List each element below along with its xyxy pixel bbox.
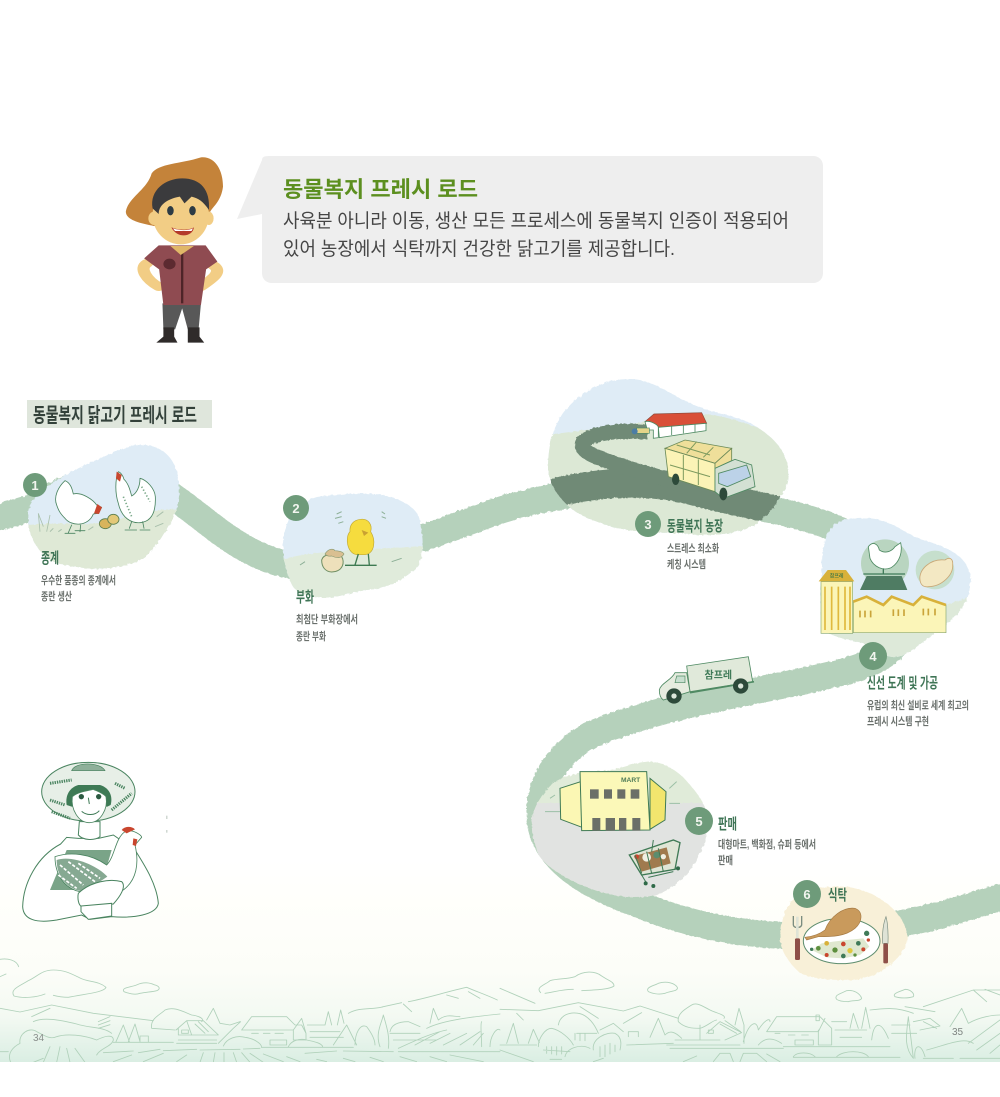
description 5 [718, 837, 816, 867]
number badge 3: 3 [644, 517, 652, 532]
landscape line art [0, 959, 1000, 1062]
icon: barn [632, 413, 707, 438]
label 4: 신선 도계 및 가공 [867, 675, 938, 692]
bubble body text: 사육분 아니라 이동, 생산 모든 프로세스에 동물복지 인증이 적용되어 [283, 210, 789, 232]
step 6: table [780, 880, 907, 980]
delivery truck [659, 657, 754, 704]
number badge 1 [23, 473, 47, 497]
step 4: slaughter and processing [818, 518, 972, 726]
description 2: 최첨단 부화장에서 [296, 612, 358, 626]
bubble body text: 있어 농장에서 식탁까지 건강한 닭고기를 제공합니다. [283, 238, 675, 260]
blob scene 1 [28, 444, 180, 570]
description 1: 우수한 품종의 종계에서 [41, 573, 116, 587]
description 3: 스트레스 최소화 [667, 541, 719, 555]
icon: plated drumstick with fork and knife [793, 908, 888, 964]
label 6: 식탁 [828, 887, 847, 904]
label 1: 종계 [41, 550, 59, 567]
description 2: 종란 부화 [296, 629, 326, 643]
page number 34: 34 [33, 1033, 45, 1044]
number badge 2: 2 [292, 501, 300, 516]
blob scene 6 [780, 887, 907, 980]
blob scene 3 [548, 379, 789, 536]
description 3: 케칭 시스템 [667, 557, 706, 571]
icon: hen on scale [860, 539, 909, 590]
page number 35: 35 [952, 1027, 964, 1038]
number badge 1: 1 [31, 478, 39, 493]
label 3: 동물복지 농장 [667, 518, 723, 535]
icon: processing plant [819, 570, 946, 633]
page background gradient [0, 860, 1000, 1062]
step 2: hatching [280, 490, 430, 643]
number badge 3 [635, 511, 661, 537]
step 3: welfare farm [548, 379, 789, 570]
farmer holding a hen [23, 762, 167, 921]
number badge 4 [859, 642, 887, 670]
description 4 [867, 698, 969, 728]
icon: livestock truck [665, 440, 755, 500]
bubble title: 동물복지 프레시 로드 [283, 177, 478, 202]
description 5: 판매 [718, 853, 733, 867]
number badge 5: 5 [695, 814, 703, 829]
number badge 2 [283, 495, 309, 521]
green road path [0, 477, 1000, 936]
icon: mart building: MART [621, 777, 640, 784]
section heading [27, 400, 212, 428]
icon: yellow chick and cracked egg [300, 512, 402, 572]
section heading: 동물복지 닭고기 프레시 로드 [33, 404, 197, 427]
description 5: 대형마트, 백화점, 슈퍼 등에서 [718, 837, 816, 851]
bubble body text [283, 210, 789, 260]
icon: plucked chicken [916, 551, 954, 589]
label 5: 판매 [718, 816, 737, 833]
step 5: retail sale [525, 755, 816, 900]
icon: mart building [545, 772, 680, 831]
icon: processing plant: 참프레 [830, 572, 844, 579]
blob scene 2 [282, 493, 424, 598]
number badge 5 [685, 807, 713, 835]
description 2 [296, 612, 358, 643]
description 3 [667, 541, 719, 571]
delivery truck: 참프레 [705, 668, 732, 681]
speech bubble [237, 156, 823, 283]
blob scene 5 [531, 761, 708, 898]
step 1: breeding hens [23, 444, 180, 602]
icon: shopping cart [629, 840, 680, 888]
description 1: 종란 생산 [41, 589, 72, 603]
label 2: 부화 [296, 589, 314, 606]
icon: two white hens and eggs [38, 472, 163, 533]
number badge 4: 4 [869, 649, 877, 664]
farmer character [126, 157, 223, 343]
description 1 [41, 573, 116, 603]
number badge 6: 6 [803, 887, 811, 902]
blob scene 4 [820, 518, 972, 658]
description 4: 프레시 시스템 구현 [867, 714, 929, 728]
